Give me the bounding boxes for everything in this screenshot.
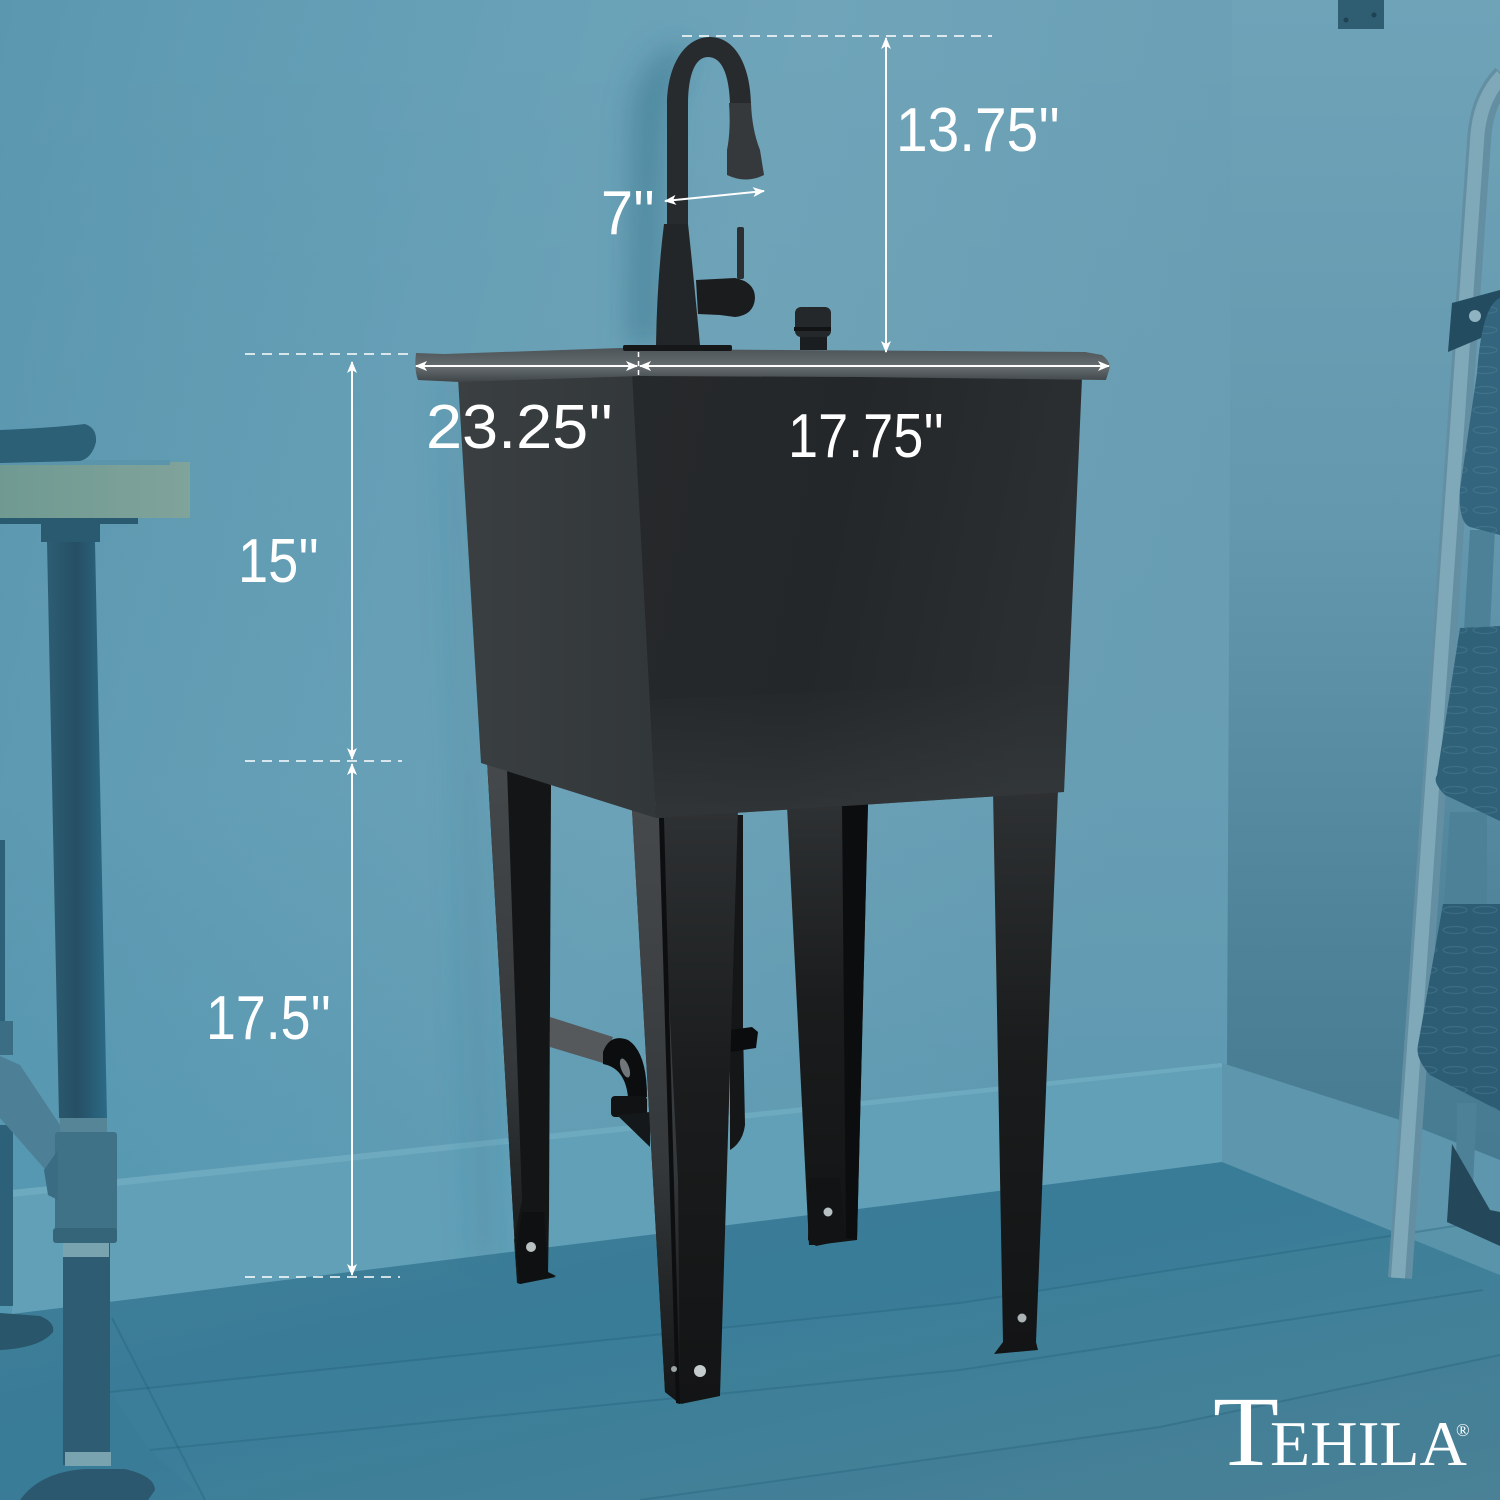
faucet lever bbox=[737, 227, 744, 279]
step ladder bbox=[1398, 76, 1500, 1278]
faucet spout bbox=[667, 37, 751, 225]
stool back leg bbox=[0, 840, 53, 1350]
front leg bbox=[632, 810, 738, 1404]
stool cross pipe bbox=[0, 1056, 62, 1175]
faucet deck plate bbox=[623, 345, 732, 351]
sink bbox=[415, 37, 1110, 1404]
dimension: leg height 17.5 inches: 17.5'' bbox=[206, 984, 331, 1053]
dimension: spout reach 7 inches bbox=[601, 179, 764, 248]
back wall bbox=[0, 0, 1235, 1320]
cloth on stool bbox=[0, 424, 96, 463]
shadows on wall bbox=[440, 42, 690, 1270]
stool flange top bbox=[41, 522, 100, 542]
dimension: width 17.75 inches: 17.75'' bbox=[788, 402, 944, 471]
side wall bbox=[1227, 0, 1500, 1170]
dimension: depth 23.25 inches: 23.25'' bbox=[426, 393, 613, 462]
Tehila logo: EHILA bbox=[1270, 1408, 1467, 1479]
stool main leg bbox=[47, 542, 107, 1118]
wall bracket bbox=[1338, 0, 1384, 29]
ladder bracket bbox=[1448, 290, 1500, 352]
stool collar bbox=[44, 1118, 117, 1243]
faucet spray head bbox=[727, 103, 764, 180]
drain trap bbox=[550, 815, 758, 1150]
back right leg bbox=[787, 804, 868, 1246]
dimension: spout reach 7 inches: 7'' bbox=[601, 179, 655, 248]
floor bbox=[0, 1162, 1500, 1500]
ladder step 1 bbox=[1460, 298, 1500, 535]
stool lower leg bbox=[63, 1243, 110, 1465]
Tehila logo bbox=[1213, 1376, 1470, 1487]
faucet handle bbox=[696, 278, 755, 317]
tub side face bbox=[458, 372, 656, 818]
tub rim bbox=[415, 348, 1110, 382]
faucet bbox=[623, 37, 764, 351]
stool wooden top bbox=[0, 460, 190, 524]
dimension: basin height 15 inches: 15'' bbox=[238, 527, 319, 596]
ladder foot wedge bbox=[1447, 1144, 1500, 1246]
ladder step 2 bbox=[1436, 626, 1500, 821]
baseboards bbox=[12, 1063, 1500, 1314]
ladder step 3 bbox=[1418, 904, 1500, 1111]
ladder front rail bbox=[1398, 76, 1500, 1278]
tub front face bbox=[632, 372, 1082, 818]
ladder back rails bbox=[1444, 530, 1500, 1244]
tub lower sheen bbox=[650, 680, 1069, 818]
stool bbox=[0, 424, 190, 1500]
right leg bbox=[993, 790, 1058, 1354]
stool foot bbox=[20, 1469, 155, 1500]
back left leg bbox=[487, 760, 556, 1284]
Tehila logo: T bbox=[1213, 1376, 1279, 1487]
faucet base bbox=[656, 224, 700, 345]
Tehila logo: ® bbox=[1456, 1420, 1470, 1440]
drain overflow knob bbox=[794, 307, 831, 350]
dimension: faucet height 13.75 inches: 13.75'' bbox=[896, 96, 1060, 165]
